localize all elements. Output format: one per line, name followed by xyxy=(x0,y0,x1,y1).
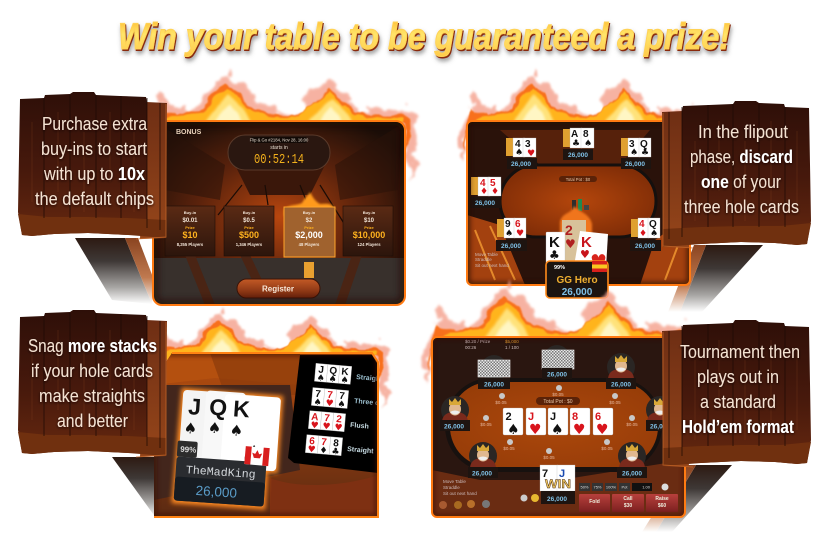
hand rankings chart: ♥ xyxy=(310,421,319,431)
seat mid left: 4 xyxy=(480,178,486,189)
prize tier 2: $0.5 xyxy=(243,218,255,224)
seat top left xyxy=(506,138,537,169)
flames: panel 4 xyxy=(425,284,696,404)
sign 4: Hold’em format xyxy=(682,417,794,437)
sign 3 xyxy=(18,310,167,457)
big hand of cards: K xyxy=(232,395,251,422)
prize tier 3 selected: $2 xyxy=(306,218,313,224)
seat lower left xyxy=(468,442,498,478)
sign 4: plays out in xyxy=(697,367,779,387)
bet size buttons: 1.00 xyxy=(642,484,651,490)
big hand of cards: ♠ xyxy=(183,419,198,438)
hand rankings chart: ♥ xyxy=(307,445,316,455)
seat lower left: 6 xyxy=(515,219,521,230)
hand rankings chart: Flush xyxy=(350,422,369,431)
seat top center: 26,000 xyxy=(568,152,588,159)
hand rankings chart: 7 xyxy=(327,390,334,401)
seat lower left: 26,000 xyxy=(501,243,521,250)
seat top left: ♥ xyxy=(527,149,535,159)
bet size buttons: 50% xyxy=(580,484,589,490)
hand rankings chart: Q xyxy=(329,366,338,377)
fold call raise buttons: $30 xyxy=(624,503,632,509)
hand rankings chart: ♠ xyxy=(313,398,322,408)
table screen xyxy=(467,121,690,285)
bet size buttons xyxy=(579,483,668,491)
seat lower right xyxy=(630,218,661,251)
sign 2 xyxy=(662,101,811,248)
hero hand: K xyxy=(549,234,560,251)
community cards: ♥ xyxy=(573,422,586,438)
hand rankings chart: J xyxy=(318,365,324,376)
hand rankings chart xyxy=(288,355,377,473)
sign 1: with up to 10x xyxy=(43,164,145,184)
hand rankings chart: Straight xyxy=(356,374,383,383)
seat top right: 3 xyxy=(629,139,635,150)
bets: $0.05 xyxy=(601,446,613,451)
prize tier 1 xyxy=(165,206,215,256)
seat lower left xyxy=(496,218,527,251)
hand rankings chart: 7 xyxy=(321,437,328,448)
fold call raise buttons: $60 xyxy=(658,503,666,509)
hand rankings chart: Straight xyxy=(347,446,374,455)
bets xyxy=(480,385,638,460)
seat top center: 26,000 xyxy=(547,372,567,378)
hold'em table screen xyxy=(432,337,685,517)
register button: Register xyxy=(262,284,294,294)
seat top center: A xyxy=(571,129,578,140)
total pot xyxy=(536,397,580,405)
sign 2: In the flipout xyxy=(698,122,788,142)
community cards: ♠ xyxy=(551,422,564,438)
prize tier 4: $10 xyxy=(364,218,375,224)
seat right xyxy=(646,396,663,431)
community cards: ♥ xyxy=(529,422,542,438)
big hand of cards: TheMadKing xyxy=(185,464,256,482)
seat top center xyxy=(563,128,594,160)
sign 1: buy-ins to start xyxy=(41,139,147,159)
seat top right: Q xyxy=(640,139,648,150)
hero seat: J xyxy=(559,468,565,480)
zoomed table screen xyxy=(154,353,377,516)
hero seat xyxy=(540,465,575,504)
seat mid left: 26,000 xyxy=(475,200,495,207)
bets: $0.05 xyxy=(480,422,492,427)
seat left xyxy=(440,396,470,431)
total pot: Total Pot : $0 xyxy=(543,399,573,405)
seat top left: 26,000 xyxy=(511,161,531,168)
countdown timer xyxy=(228,135,330,170)
side options xyxy=(443,479,477,496)
seat top left: 3 xyxy=(525,139,531,150)
seat top right: 26,000 xyxy=(625,161,645,168)
tournament lobby screen xyxy=(153,121,405,305)
bets: $0.05 xyxy=(543,455,555,460)
hand rankings chart: 8 xyxy=(333,438,340,449)
prize tier 1: $10 xyxy=(182,230,198,240)
prize tier 4: 124 Players xyxy=(357,242,381,247)
side options: Straddle xyxy=(475,257,492,262)
panel: more stacks xyxy=(18,310,404,518)
big hand of cards: ♠ xyxy=(239,439,268,476)
hero hand: ♥ xyxy=(580,248,590,261)
hero hand: ♥ xyxy=(590,251,607,273)
bet size buttons: Pot xyxy=(621,484,628,490)
hand rankings chart: 7 xyxy=(339,391,346,402)
bets: $0.05 xyxy=(609,400,621,405)
hero hand: GG Hero xyxy=(556,275,598,286)
fold call raise buttons xyxy=(579,494,678,512)
side options: Move Table xyxy=(475,252,498,257)
seat mid left: 5 xyxy=(490,178,496,189)
sign 3: and better xyxy=(57,411,128,431)
hand rankings chart: ♥ xyxy=(334,423,343,434)
sign 2: one of your xyxy=(701,172,781,192)
seat left: 26,000 xyxy=(444,424,464,430)
poker table xyxy=(445,378,662,472)
flag: Canada xyxy=(244,446,270,466)
community cards: J xyxy=(550,411,556,423)
seat top left xyxy=(478,355,510,389)
big hand of cards: Q xyxy=(208,394,228,421)
header stats: $5,000 xyxy=(505,339,519,344)
side options: Straddle xyxy=(443,485,460,490)
register button xyxy=(237,279,320,298)
prize tier 1: 8,255 Players xyxy=(177,242,204,247)
poker table xyxy=(500,165,656,237)
panel: buy-ins xyxy=(18,73,417,305)
hero hand: 26,000 xyxy=(562,287,593,298)
seat lower left: ♠ xyxy=(505,229,513,239)
hero hand: ♣ xyxy=(549,248,560,262)
sign 2: three hole cards xyxy=(684,197,799,217)
flames: panel 3 xyxy=(148,311,389,407)
hero seat: 26,000 xyxy=(547,496,567,503)
seat right: 26,000 xyxy=(650,424,670,430)
prize tier 2: Prize xyxy=(244,225,255,230)
fold call raise buttons: Call xyxy=(623,496,633,502)
bets: $0.05 xyxy=(626,422,638,427)
hand rankings chart: 7 xyxy=(315,389,322,400)
prize tier 2: Buy-in xyxy=(243,210,256,215)
big hand of cards: ♠ xyxy=(207,419,222,437)
sign 4 xyxy=(662,320,811,467)
sign 4: a standard xyxy=(700,392,776,412)
countdown timer: starts in xyxy=(270,145,288,151)
big hand of cards: J xyxy=(187,393,202,420)
community cards: 2 xyxy=(506,411,512,423)
leg: sign 2 xyxy=(668,245,763,312)
header stats: 1 / 100 xyxy=(505,345,519,350)
seat top center: ♣ xyxy=(572,139,580,149)
title: Win your table to be guaranteed a prize! xyxy=(118,16,730,57)
emote icons xyxy=(439,494,539,509)
hero hand: 99% xyxy=(554,265,565,271)
sign 1: the default chips xyxy=(35,189,154,209)
flames: panel 1 xyxy=(146,73,417,180)
hero hand: ♥ xyxy=(565,237,576,251)
sign 1: Purchase extra xyxy=(42,114,148,134)
countdown timer: Flip & Go #2184, Nov 28, 16:00 xyxy=(250,138,309,142)
seat top left: ♠ xyxy=(515,148,523,158)
sign 3: Snag more stacks xyxy=(28,336,157,356)
seat lower left: 26,000 xyxy=(472,470,492,478)
hand rankings chart: ♥ xyxy=(322,422,331,432)
hand rankings chart: A xyxy=(311,412,319,423)
bets: $0.05 xyxy=(552,392,564,397)
prize tier 4: $10,000 xyxy=(353,230,385,240)
prize tier 3 selected: 48 Players xyxy=(299,242,320,247)
hand rankings chart: ♠ xyxy=(337,400,346,410)
big hand of cards: ♠ xyxy=(229,421,244,440)
seat top left: 4 xyxy=(515,139,521,150)
bet size buttons: 100% xyxy=(606,484,617,490)
leg: sign 3 xyxy=(112,457,156,518)
prize tier 2: 1,346 Players xyxy=(236,242,263,247)
seat top right xyxy=(621,138,651,169)
side options: Sit out next hand xyxy=(475,263,509,268)
sign 3: if your hole cards xyxy=(31,361,153,381)
seat top right xyxy=(606,353,636,389)
prize tier 3 selected: $2,000 xyxy=(295,230,323,240)
seat top right: 26,000 xyxy=(611,382,631,388)
fold call raise buttons: Fold xyxy=(589,499,600,505)
prize tier 3 selected xyxy=(284,192,335,257)
seat top center xyxy=(542,345,574,379)
header stats: $0.20 / Prize xyxy=(465,339,491,344)
seat lower right: 26,000 xyxy=(635,243,655,250)
prize tier 4: Prize xyxy=(364,225,375,230)
big hand of cards: 99% xyxy=(180,445,197,455)
logo text: BONUS xyxy=(176,129,202,136)
seat top right: ♣ xyxy=(641,148,649,158)
big hand of cards xyxy=(174,389,281,508)
community cards: 6 xyxy=(595,411,601,423)
hero hand xyxy=(546,206,608,298)
hand rankings chart: ♠ xyxy=(340,376,349,386)
sign 1 xyxy=(18,92,167,239)
sign 3: make straights xyxy=(39,386,145,406)
seat mid left: ♦ xyxy=(480,187,488,197)
leg: sign 1 xyxy=(75,238,154,304)
bets: $0.05 xyxy=(503,446,515,451)
seat top left: 26,000 xyxy=(484,382,504,388)
side options: Move Table xyxy=(443,479,466,484)
hand rankings chart: ♦ xyxy=(319,446,328,456)
community cards: ♠ xyxy=(507,422,520,438)
seat lower right: Q xyxy=(649,219,657,230)
seat mid left xyxy=(470,177,501,208)
side options xyxy=(475,252,508,267)
hero seat: 7 xyxy=(542,468,548,480)
seat top center: 8 xyxy=(583,129,589,140)
hand rankings chart: Three of a kind xyxy=(354,398,404,409)
seat lower right xyxy=(617,442,647,478)
seat top right: ♠ xyxy=(630,148,638,158)
big hand of cards: 26,000 xyxy=(195,483,237,501)
prize tier 3 selected: Prize xyxy=(304,225,315,230)
panel: hold'em xyxy=(425,284,811,532)
fold call raise buttons: Raise xyxy=(655,496,669,502)
seat mid left: ♦ xyxy=(491,187,499,197)
community cards: ♥ xyxy=(596,422,609,438)
hero hand: K xyxy=(581,234,592,251)
prize tier 1: Buy-in xyxy=(184,210,197,215)
prize tier 2: $500 xyxy=(239,230,259,240)
hand rankings chart: ♣ xyxy=(331,447,340,458)
prize tier 3 selected: Buy-in xyxy=(303,210,316,215)
community cards: 8 xyxy=(572,411,578,423)
hand rankings chart: ♥ xyxy=(325,399,334,409)
community cards: J xyxy=(528,411,534,423)
flames: panel 2 xyxy=(461,73,702,180)
hero seat: WIN xyxy=(545,477,571,491)
seat lower right: 26,000 xyxy=(622,470,642,478)
bets: $0.05 xyxy=(495,400,507,405)
hand rankings chart: 6 xyxy=(309,436,316,447)
total pot xyxy=(559,176,597,182)
header stats: 00:26 xyxy=(465,345,477,350)
prize tier 1: Prize xyxy=(185,225,196,230)
panel: flipout xyxy=(461,73,811,312)
hand rankings chart: K xyxy=(341,367,350,378)
hand rankings chart: ♠ xyxy=(316,373,325,384)
seat lower left: 9 xyxy=(505,219,511,230)
side options: Sit out next hand xyxy=(443,491,477,496)
prize tier 4 xyxy=(343,206,393,256)
hand rankings chart: 2 xyxy=(336,414,343,425)
prize tier 1: $0.01 xyxy=(182,218,198,224)
hand rankings chart: ♠ xyxy=(328,374,337,385)
header stats xyxy=(465,340,519,349)
leg: sign 4 xyxy=(642,465,732,532)
sign 2: phase, discard xyxy=(690,147,793,167)
seat top center: ♠ xyxy=(584,139,592,149)
countdown timer: 00:52:14 xyxy=(254,152,304,168)
total pot: Total Pot : $0 xyxy=(566,177,591,182)
seat lower right: ♠ xyxy=(650,229,658,239)
seat lower right: ♦ xyxy=(639,229,647,239)
prize tier 2 xyxy=(224,206,274,256)
hand rankings chart: 7 xyxy=(324,413,331,424)
bet size buttons: 75% xyxy=(593,484,602,490)
seat lower right: 4 xyxy=(639,219,645,230)
prize tier 4: Buy-in xyxy=(363,210,376,215)
community cards xyxy=(503,408,613,438)
seat lower left: ♥ xyxy=(516,229,524,239)
hero hand: 2 xyxy=(565,222,573,238)
chip stacks xyxy=(572,199,589,211)
sign 4: Tournament then xyxy=(680,342,800,362)
